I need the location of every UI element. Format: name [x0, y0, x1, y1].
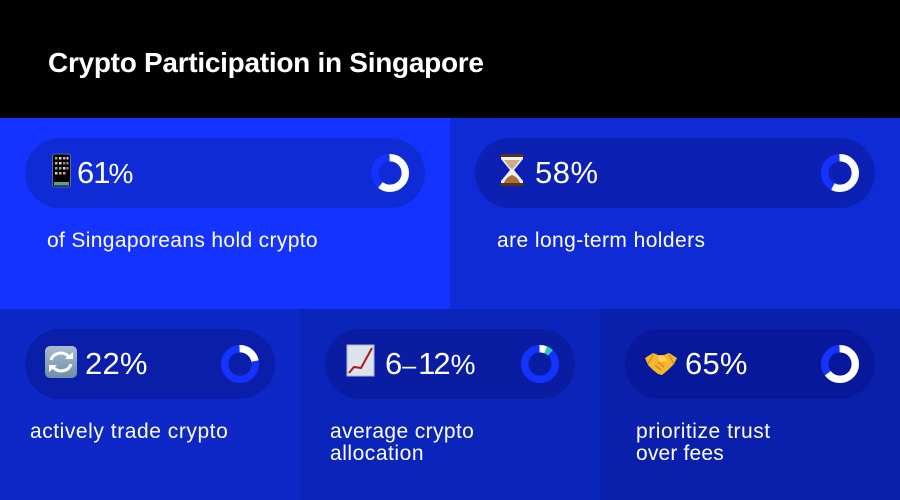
- value: 6–12%: [385, 346, 476, 381]
- icon: chart increasing: [346, 344, 374, 376]
- description: actively trade crypto: [30, 420, 228, 443]
- description: average crypto: [330, 420, 474, 443]
- panel: 58% long-term holders: [450, 118, 900, 309]
- donut chart: 6–12%: [521, 345, 559, 383]
- title: Crypto Participation in Singapore: [48, 47, 484, 78]
- donut chart: 58%: [821, 154, 859, 192]
- icon: mobile phone: [52, 154, 71, 188]
- donut chart: 22%: [221, 345, 259, 383]
- description: [636, 420, 771, 465]
- stat pill: [625, 329, 875, 399]
- stat pill: [475, 138, 875, 208]
- description: [330, 420, 474, 465]
- description: are long-term holders: [497, 229, 705, 252]
- stat pill: [325, 329, 575, 399]
- donut chart: 61%: [371, 154, 409, 192]
- value: 61%: [77, 155, 133, 190]
- donut chart: 65%: [821, 345, 859, 383]
- stat pill: [25, 329, 275, 399]
- description: prioritize trust: [636, 420, 771, 443]
- description: of Singaporeans hold crypto: [47, 229, 318, 252]
- icon: hourglass: [500, 154, 524, 186]
- panel: 65% trust over fees: [600, 309, 900, 500]
- panel: 61% hold crypto: [0, 118, 450, 309]
- icon: arrows in button: [45, 346, 77, 378]
- panel: 22% active traders: [0, 309, 300, 500]
- description: allocation: [330, 442, 424, 465]
- description: over fees: [636, 442, 724, 465]
- value: 22%: [85, 346, 148, 381]
- value: 65%: [685, 346, 748, 381]
- icon: handshake: [645, 353, 677, 375]
- header band: [0, 0, 900, 118]
- stat pill: [25, 138, 425, 208]
- panel: 6–12% allocation: [300, 309, 600, 500]
- value: 58%: [535, 155, 599, 190]
